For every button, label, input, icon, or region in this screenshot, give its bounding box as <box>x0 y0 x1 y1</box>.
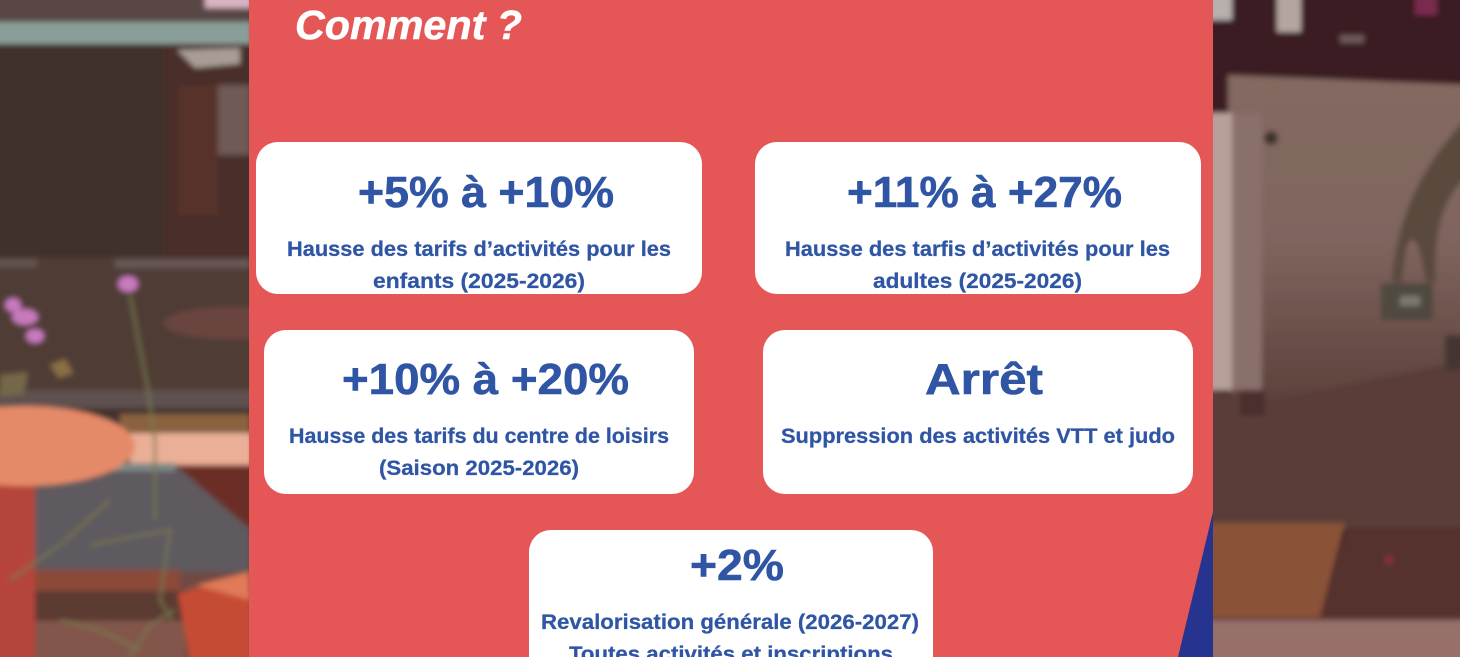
card: leisure centre: +10% à +20% <box>342 355 629 404</box>
left background photo: garden terrace with tables <box>0 0 249 657</box>
card: adult activities: adultes (2025-2026) <box>873 270 1082 293</box>
card: adult activities: +11% à +27% <box>847 168 1122 217</box>
card: children's activities: +5% à +10% <box>358 168 614 217</box>
card: discontinued activities <box>763 330 1193 494</box>
card: general increase <box>529 530 933 657</box>
card: children's activities: enfants (2025-2026) <box>373 270 585 293</box>
card: discontinued activities: Arrêt <box>925 355 1043 404</box>
card: leisure centre: (Saison 2025-2026) <box>379 457 579 480</box>
card: adult activities <box>755 142 1201 294</box>
blue corner triangle <box>1178 512 1213 657</box>
card: leisure centre <box>264 330 694 494</box>
card: discontinued activities: Suppression des activités VTT et judo <box>781 425 1175 448</box>
card: children's activities <box>256 142 702 294</box>
card: leisure centre: Hausse des tarifs du centre de loisirs <box>289 425 669 448</box>
right background photo: interior wall and palm <box>1208 0 1460 657</box>
card: general increase: Revalorisation générale (2026-2027) <box>541 611 919 634</box>
card: children's activities: Hausse des tarifs d’activités pour les <box>287 238 671 261</box>
red central panel <box>249 0 1213 657</box>
title: Comment ? <box>295 2 522 48</box>
card: general increase: +2% <box>690 541 784 590</box>
card: adult activities: Hausse des tarfis d’activités pour les <box>785 238 1170 261</box>
